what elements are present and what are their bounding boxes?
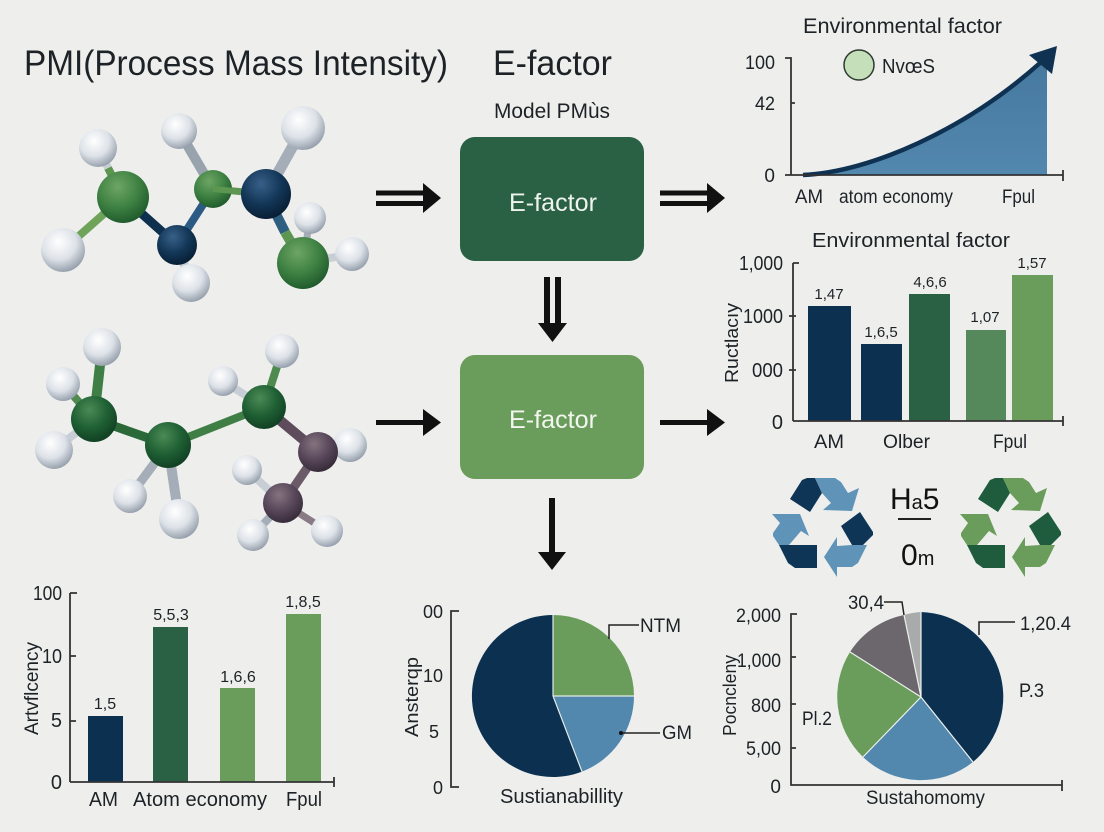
chart: pie right: 5,00 xyxy=(746,739,781,760)
chart: pie right: 800 xyxy=(751,696,781,717)
box: E-factor dark: E-factor xyxy=(509,189,597,217)
chart: pie right: 2,000 xyxy=(736,606,781,627)
chart: pie right xyxy=(720,593,1071,809)
chart: pie right: 1,20.4 xyxy=(1020,614,1071,635)
chart: area top right: 42 xyxy=(755,94,775,115)
chart: pie right: 0 xyxy=(770,777,781,798)
chart: bar bottom left: 5 xyxy=(51,710,62,732)
chart: area top right: Environmental factor xyxy=(803,15,1002,38)
arrow: middle right xyxy=(660,409,725,436)
chart: bar bottom left xyxy=(22,583,334,811)
chart: bar right: 1000 xyxy=(743,306,783,328)
chart: bar right: 1,57 xyxy=(1017,255,1047,272)
subtitle: Model PMIs: Model PMùs xyxy=(494,100,610,123)
chart: pie center: NTM xyxy=(640,616,681,637)
chart: pie center: 5 xyxy=(429,722,439,742)
label: Ha5 over 0m: 0m xyxy=(901,539,934,572)
chart: area top right xyxy=(745,15,1063,208)
chart: bar bottom left: 1,5 xyxy=(94,696,116,713)
chart: bar right: 1,47 xyxy=(814,286,844,303)
label: Ha5 over 0m: Ha5 xyxy=(890,483,939,516)
chart: bar right: 1,6,5 xyxy=(864,324,898,341)
chart: pie center: Sustianabillity xyxy=(500,786,623,808)
chart: bar right: 1,07 xyxy=(970,309,1000,326)
chart: area top right: atom economy xyxy=(839,187,953,208)
arrow: top left double xyxy=(376,183,441,213)
chart: area top right: AM xyxy=(795,187,823,208)
chart: pie center: GM xyxy=(662,723,692,744)
arrow: top right double xyxy=(660,183,725,213)
chart: area top right: Fpul xyxy=(1002,187,1035,208)
label: Ha5 over 0m xyxy=(890,483,939,572)
chart: pie right: 1,000 xyxy=(737,651,781,672)
chart: bar bottom left: 0 xyxy=(51,772,62,794)
chart: pie right: Pl.2 xyxy=(802,709,832,730)
chart: bar right: 1,000 xyxy=(739,253,783,275)
chart: bar right: 0 xyxy=(772,412,783,434)
chart: bar right: Environmental factor xyxy=(812,230,1010,252)
chart: bar bottom left: 1,6,6 xyxy=(220,669,256,686)
chart: bar right: 000 xyxy=(752,360,783,382)
arrow: down double xyxy=(538,277,567,342)
chart: pie center: 00 xyxy=(423,602,443,622)
chart: bar bottom left: 5,5,3 xyxy=(153,607,189,624)
title: PMI: PMI(Process Mass Intensity) xyxy=(24,44,448,83)
chart: pie center: Ansterqp xyxy=(402,657,422,737)
chart: pie center: 10 xyxy=(423,666,443,686)
title: E-factor: E-factor xyxy=(493,44,612,83)
box: E-factor light: E-factor xyxy=(509,406,597,434)
chart: pie right: Sustahomomy xyxy=(866,788,985,809)
chart: bar bottom left: AM xyxy=(89,789,118,811)
chart: bar right: Fpul xyxy=(993,432,1027,453)
chart: bar bottom left: Fpul xyxy=(286,789,322,811)
chart: bar bottom left: Atom economy xyxy=(133,789,267,811)
chart: area top right: 100 xyxy=(745,53,775,74)
chart: area top right: 0 xyxy=(764,166,775,187)
chart: bar bottom left: 10 xyxy=(42,646,62,668)
molecule: bottom xyxy=(35,328,367,551)
chart: bar right xyxy=(722,230,1063,453)
chart: area top right: NvœS xyxy=(882,56,935,78)
chart: bar bottom left: 1,8,5 xyxy=(285,594,321,611)
chart: pie center: 0 xyxy=(433,778,443,798)
arrow: down xyxy=(538,498,566,570)
box: E-factor dark xyxy=(460,137,644,261)
molecule: top xyxy=(41,106,369,302)
chart: pie right: Pocncleny xyxy=(720,655,740,736)
chart: pie right: P.3 xyxy=(1019,681,1044,702)
chart: bar right: AM xyxy=(814,432,844,453)
chart: pie right: 30,4 xyxy=(848,593,884,614)
chart: bar bottom left: Artvflcency xyxy=(22,642,43,735)
icon: recycle green xyxy=(960,478,1061,577)
chart: bar right: 4,6,6 xyxy=(913,274,947,291)
chart: bar right: Ructlacıy xyxy=(722,303,742,383)
icon: recycle blue xyxy=(772,478,873,577)
chart: bar bottom left: 100 xyxy=(33,583,62,605)
box: E-factor light xyxy=(460,355,644,479)
chart: bar right: Olber xyxy=(883,432,931,453)
chart: pie center xyxy=(402,602,692,808)
arrow: middle left xyxy=(376,409,441,436)
